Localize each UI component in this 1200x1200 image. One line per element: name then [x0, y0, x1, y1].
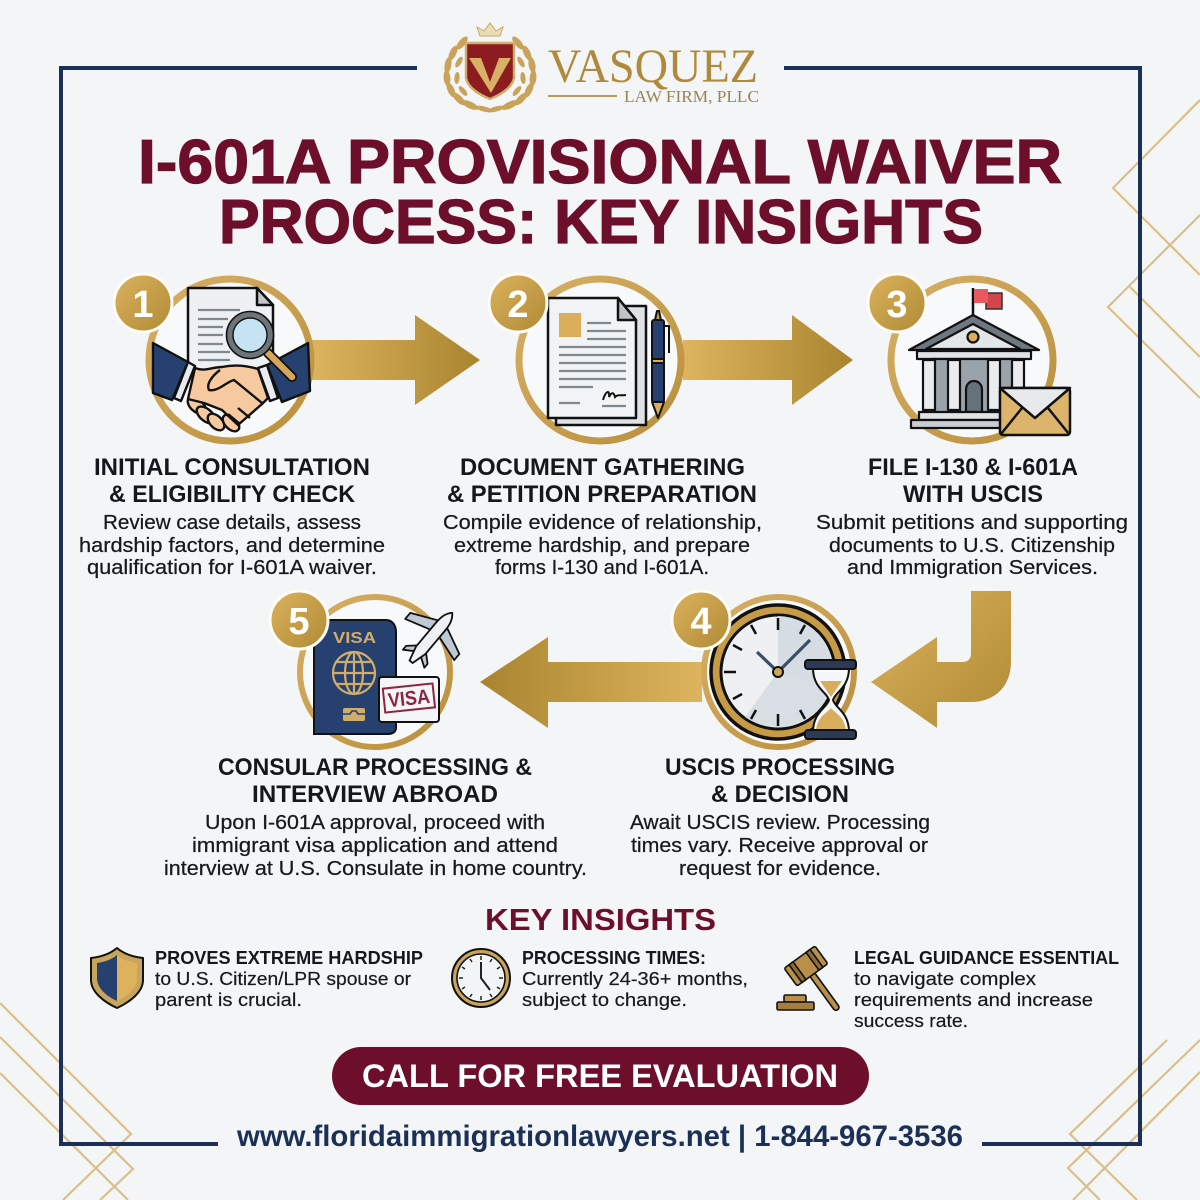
icon: pen	[652, 311, 669, 418]
step 5 number: 5	[288, 601, 310, 643]
step 1 heading	[94, 454, 370, 508]
icon: envelope	[1000, 388, 1070, 435]
step 2 heading: & PETITION PREPARATION	[447, 481, 757, 508]
icon: handshake	[153, 343, 310, 434]
call to action button: CALL FOR FREE EVALUATION	[362, 1058, 838, 1094]
step 4 heading: & DECISION	[711, 781, 849, 808]
arrow: step 1 to 2	[310, 315, 480, 405]
step 2 heading: DOCUMENT GATHERING	[460, 454, 745, 481]
icon: document	[188, 288, 273, 372]
insight: processing times	[452, 947, 748, 1010]
step 5 text: Upon I-601A approval, proceed with	[205, 811, 545, 834]
insight text: to U.S. Citizen/LPR spouse or	[155, 968, 411, 989]
step 5 text	[164, 811, 587, 880]
step 4 badge	[672, 591, 730, 649]
step 5 ring	[300, 597, 450, 747]
icon: passport	[314, 620, 396, 734]
step 3 text: Submit petitions and supporting	[816, 511, 1128, 534]
step 4 text: times vary. Receive approval or	[631, 834, 928, 857]
step 5 heading: INTERVIEW ABROAD	[252, 781, 498, 808]
icon: courthouse	[909, 315, 1039, 428]
arrow: step 4 to 5	[480, 637, 702, 728]
icon: shield	[91, 948, 143, 1008]
step 1 text: Review case details, assess	[103, 511, 361, 534]
step 1 text: hardship factors, and determine	[79, 534, 385, 557]
icon: documents	[548, 298, 646, 425]
step 3 number: 3	[886, 284, 908, 326]
step 4 text: request for evidence.	[679, 857, 881, 880]
icon: laurel right	[487, 35, 537, 114]
document lines	[198, 310, 240, 360]
insight title: LEGAL GUIDANCE ESSENTIAL	[854, 947, 1119, 968]
step 3 badge	[868, 274, 926, 332]
step 1 heading: INITIAL CONSULTATION	[94, 454, 370, 481]
icon: laurel left	[443, 35, 493, 114]
title: PROCESS: KEY INSIGHTS	[219, 188, 983, 257]
step 3 heading: WITH USCIS	[903, 481, 1043, 508]
step 4 text: Await USCIS review. Processing	[630, 811, 930, 834]
document text lines	[559, 323, 626, 406]
step 2 text	[443, 511, 762, 579]
step 4 text	[630, 811, 930, 880]
icon: airplane	[387, 592, 477, 682]
icon: magnifier	[226, 312, 292, 377]
icon: gavel	[777, 946, 853, 1021]
step 3	[868, 274, 1070, 441]
step 2 text: forms I-130 and I-601A.	[495, 556, 709, 579]
signature	[603, 392, 626, 400]
step 2 heading	[447, 454, 757, 508]
step 4 heading: USCIS PROCESSING	[665, 754, 895, 781]
icon: visa stamp card: VISA	[387, 686, 431, 712]
step 4 number: 4	[690, 601, 712, 643]
insight title: PROVES EXTREME HARDSHIP	[155, 947, 423, 968]
insight text: parent is crucial.	[155, 989, 302, 1010]
step 5 badge	[270, 591, 328, 649]
logo: Vasquez Law Firm	[443, 23, 759, 114]
step 1 badge	[114, 274, 172, 332]
insight text: requirements and increase	[854, 989, 1093, 1010]
key insights heading: KEY INSIGHTS	[485, 902, 716, 937]
document photo block	[559, 313, 581, 337]
icon: hourglass	[805, 660, 856, 739]
step 5 text: interview at U.S. Consulate in home country.	[164, 857, 587, 880]
insight text	[155, 968, 411, 1010]
step 5 heading	[218, 754, 532, 808]
insight text: to navigate complex	[854, 968, 1037, 989]
insight title: PROCESSING TIMES:	[522, 947, 706, 968]
arrow: step 3 to 4	[871, 591, 1011, 728]
icon: visa stamp card	[379, 677, 439, 722]
step 2 text: extreme hardship, and prepare	[454, 534, 750, 557]
step 5 text: immigrant visa application and attend	[192, 834, 558, 857]
step 2 number: 2	[507, 284, 529, 326]
call to action button	[332, 1047, 869, 1105]
icon: clock	[711, 605, 845, 739]
insight text	[522, 968, 748, 1010]
insight text: success rate.	[854, 1010, 968, 1031]
insight: legal guidance	[777, 946, 1119, 1031]
logo rule	[548, 95, 617, 97]
insight: extreme hardship	[91, 947, 423, 1010]
step 2 text: Compile evidence of relationship,	[443, 511, 762, 534]
step 3 text: documents to U.S. Citizenship	[829, 534, 1115, 557]
step 3 text	[816, 511, 1128, 579]
insight text	[854, 968, 1093, 1031]
icon: crown	[477, 23, 503, 36]
insight text: subject to change.	[522, 989, 687, 1010]
step 3 heading: FILE I-130 & I-601A	[868, 454, 1078, 481]
step 3 text: and Immigration Services.	[847, 556, 1098, 579]
contact line: www.floridaimmigrationlawyers.net | 1-844-967-3536	[236, 1120, 963, 1153]
arrow: step 2 to 3	[683, 315, 853, 405]
title: I-601A PROVISIONAL WAIVER	[138, 128, 1062, 197]
icon: V monogram	[469, 58, 511, 93]
step 2 ring	[519, 279, 681, 441]
insight text: Currently 24-36+ months,	[522, 968, 748, 989]
step 4	[672, 591, 856, 747]
step 5	[270, 591, 477, 747]
step 2 badge	[489, 274, 547, 332]
step 1 heading: & ELIGIBILITY CHECK	[109, 481, 355, 508]
step 5 heading: CONSULAR PROCESSING &	[218, 754, 532, 781]
logo name: VASQUEZ	[548, 40, 758, 93]
step 1 text: qualification for I-601A waiver.	[87, 556, 377, 579]
icon: passport: VISA	[333, 630, 377, 647]
step 3 heading	[868, 454, 1078, 508]
title	[138, 128, 1062, 257]
logo subtitle: LAW FIRM, PLLC	[624, 87, 759, 106]
step 1 text	[79, 511, 385, 579]
step 4 heading	[665, 754, 895, 808]
step 1 number: 1	[132, 284, 154, 326]
step 3 ring	[891, 279, 1053, 441]
step 1 ring	[149, 279, 311, 441]
step 4 ring	[704, 597, 854, 747]
icon: clock	[452, 949, 510, 1007]
step 2	[489, 274, 681, 441]
icon: flag	[973, 288, 1002, 315]
icon: shield crest	[466, 43, 514, 99]
step 1	[114, 274, 311, 441]
